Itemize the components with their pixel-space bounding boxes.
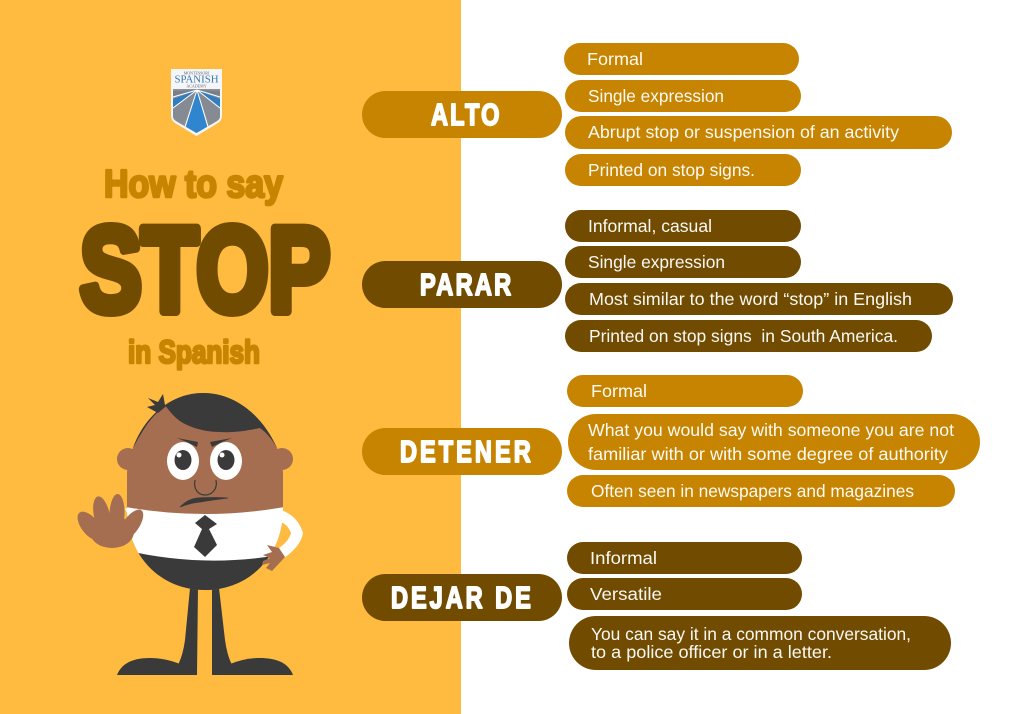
- pill: Single expression: Single expression: [588, 86, 724, 106]
- tie: [194, 515, 217, 557]
- raised hand: [73, 494, 148, 548]
- group: DETENER: [362, 375, 980, 507]
- pill: Informal, casual: [565, 210, 801, 242]
- logo: Spanish academy shield: MONTESSORI: [184, 70, 210, 76]
- pill: What you would say: What you would say with someone you are not: [588, 420, 954, 440]
- pill: Informal: Informal: [590, 548, 657, 568]
- pill: Often seen: Often seen in newspapers and magazines: [591, 481, 914, 501]
- pill: What you would say: [568, 414, 980, 470]
- label: ALTO: [362, 91, 562, 138]
- label: PARAR: [362, 261, 562, 308]
- logo: Spanish academy shield: SPANISH: [174, 74, 218, 86]
- ears: [117, 448, 139, 470]
- group: PARAR: [362, 210, 953, 352]
- group: ALTO: [362, 43, 952, 186]
- label: DEJAR DE: DEJAR DE: [391, 580, 531, 615]
- pill: Single expression: [565, 246, 801, 278]
- pill: Informal: [567, 542, 802, 574]
- pill: Single expression: [565, 80, 801, 112]
- pill: Printed on stop signs: Printed on stop signs.: [588, 160, 755, 180]
- title: in Spanish: in Spanish: [128, 334, 260, 370]
- nose: [195, 480, 216, 495]
- pill: You can say it: [569, 616, 951, 670]
- label: ALTO: ALTO: [431, 97, 499, 132]
- pill: Formal: Formal: [591, 381, 647, 401]
- eyebrows: [177, 438, 232, 447]
- right sleeve: [279, 510, 303, 558]
- pill: Most similar: Most similar to the word “stop” in English: [589, 289, 912, 309]
- legs and shoes: [117, 588, 293, 675]
- orange left panel: [0, 0, 461, 714]
- body and head egg: [127, 393, 283, 590]
- pill: Printed on stop signs: [565, 154, 801, 186]
- pill: What you would say: familiar with or with some degree of authority: [588, 444, 948, 464]
- pill: Formal: [564, 43, 799, 75]
- pill: Often seen: [567, 475, 955, 507]
- pill: Informal, casual: Informal, casual: [588, 216, 712, 236]
- pill: Versatile: Versatile: [590, 584, 662, 604]
- title: STOP: STOP: [80, 203, 330, 337]
- label: DETENER: [362, 428, 562, 475]
- label: DETENER: DETENER: [400, 434, 531, 469]
- pill: Most similar: [565, 283, 953, 315]
- pill: You can say it: You can say it in a common conversation,: [591, 624, 911, 644]
- mouth: [180, 498, 228, 507]
- pill: Single expression: Single expression: [588, 252, 725, 272]
- label: DEJAR DE: [362, 574, 562, 621]
- label: PARAR: PARAR: [420, 267, 511, 302]
- pill: Versatile: [567, 578, 802, 610]
- title: How to say: How to say: [104, 163, 283, 206]
- eyes: [167, 442, 242, 480]
- group: DEJAR DE: [362, 542, 951, 670]
- pill: Formal: [567, 375, 803, 407]
- pill: Abrupt stop: Abrupt stop or suspension of an activity: [588, 122, 899, 142]
- pill: Printed in South America: Printed on stop signs in South America.: [589, 326, 898, 346]
- pill: Formal: Formal: [587, 49, 643, 69]
- character: stern man raising hand: [73, 385, 303, 675]
- logo: Spanish academy shield: [171, 69, 222, 136]
- logo: Spanish academy shield: ACADEMY: [186, 84, 207, 88]
- pill: Abrupt stop: [565, 116, 952, 149]
- hand on hip: [262, 545, 285, 571]
- pill: Printed in South America: [565, 320, 932, 352]
- hair spikes: [147, 394, 170, 413]
- pill: You can say it: to a police officer or in a letter.: [591, 642, 832, 662]
